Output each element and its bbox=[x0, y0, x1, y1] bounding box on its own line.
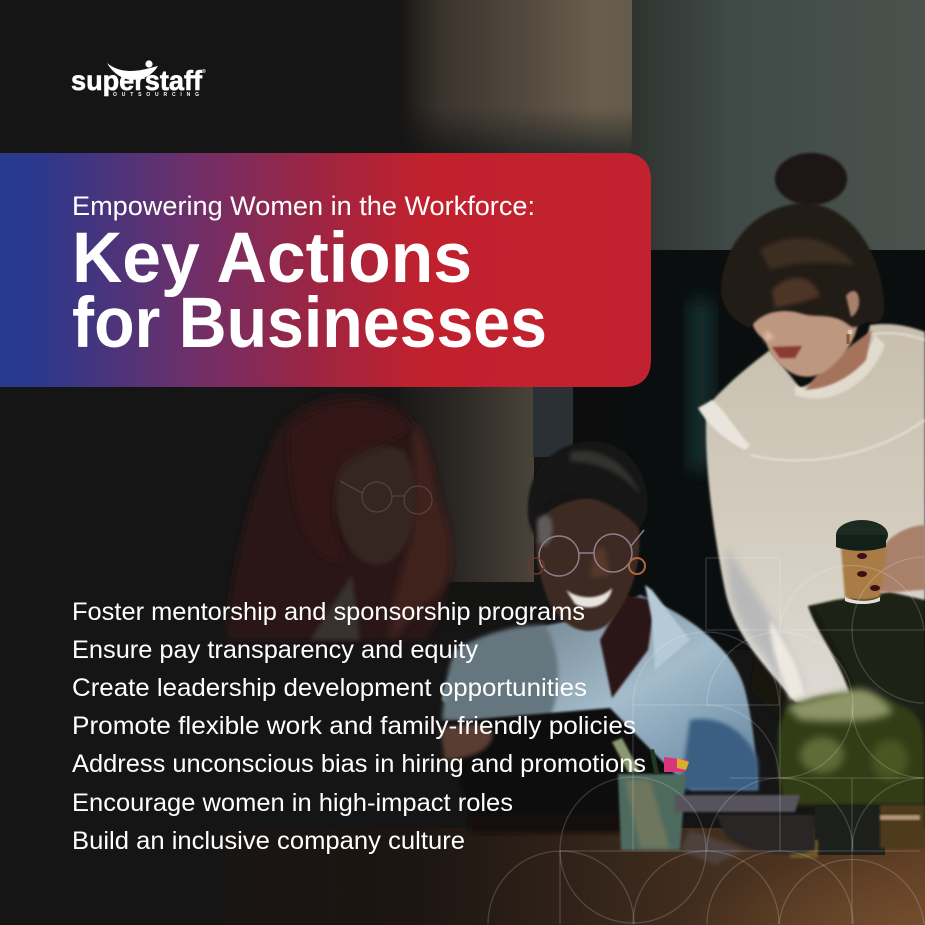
logo: superstaff outsourcing: OUTSOURCING bbox=[113, 92, 199, 98]
title: Key Actions bbox=[72, 219, 472, 298]
action list: Address unconscious bias in hiring and promotions bbox=[72, 750, 646, 778]
action list bbox=[72, 598, 646, 855]
title banner bbox=[0, 153, 651, 387]
photo background bbox=[408, 0, 925, 925]
action list: Build an inclusive company culture bbox=[72, 827, 465, 855]
logo: superstaff outsourcing: superstaff bbox=[71, 65, 203, 96]
action list: Ensure pay transparency and equity bbox=[72, 636, 479, 664]
person: red-haired woman bbox=[225, 395, 451, 640]
pen cup and desk items bbox=[612, 738, 815, 865]
title bbox=[72, 219, 547, 363]
action list: Encourage women in high-impact roles bbox=[72, 789, 513, 817]
logo: superstaff outsourcing: ® bbox=[202, 68, 206, 75]
person: standing woman with coffee cup bbox=[698, 153, 925, 745]
person: woman in blue shirt bbox=[440, 441, 758, 815]
left dark overlay bbox=[0, 387, 225, 925]
action list: Foster mentorship and sponsorship programs bbox=[72, 598, 585, 626]
title: for Businesses bbox=[72, 284, 547, 363]
geometric line art bbox=[488, 557, 924, 924]
plant bbox=[778, 689, 925, 858]
action list: Promote flexible work and family-friendly policies bbox=[72, 712, 636, 740]
action list: Create leadership development opportunities bbox=[72, 674, 587, 702]
subtitle: Empowering Women in the Workforce: bbox=[72, 191, 535, 221]
